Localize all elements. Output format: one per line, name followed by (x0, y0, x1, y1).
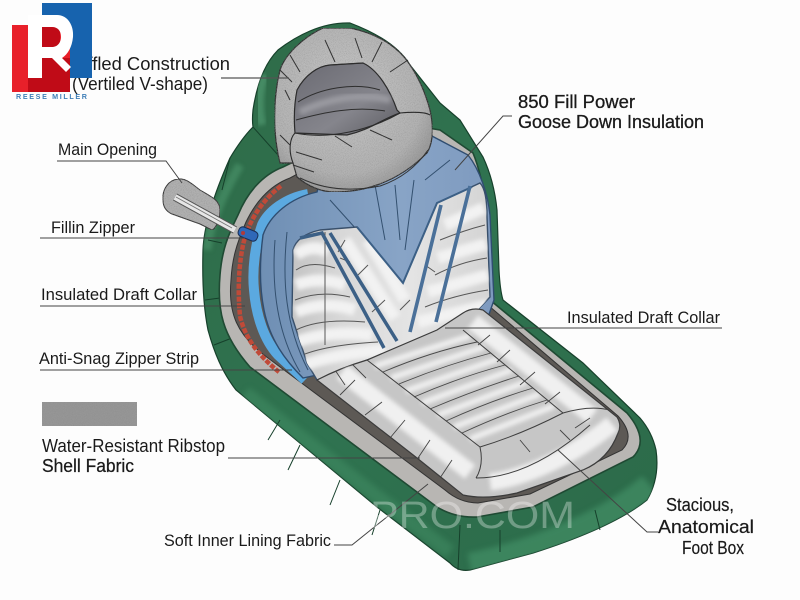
callout: fillin zipper: Fillin Zipper (51, 218, 135, 237)
green outer shell (203, 23, 657, 570)
gray rim (219, 120, 640, 517)
logo (12, 3, 92, 101)
callout: shell fabric: Shell Fabric (42, 456, 134, 476)
callout: main opening (57, 140, 182, 183)
callout: foot box: Foot Box (682, 538, 744, 558)
callout: anti-snag zipper strip: Anti-Snag Zipper Strip (39, 349, 199, 368)
foot box insulated bed (317, 309, 620, 497)
callout: baffled construction (65, 54, 289, 94)
callout: fill power: 850 Fill Power (518, 92, 635, 112)
fabric swatch (42, 402, 137, 426)
hood (275, 28, 432, 192)
red zipper strip (239, 186, 281, 372)
callout: shell fabric (42, 436, 420, 476)
light blue draft tube (253, 194, 308, 380)
logo: REESE MILLER (16, 92, 88, 101)
callout: shell fabric: Water-Resistant Ribstop (42, 436, 225, 456)
callout: foot box (558, 450, 754, 558)
callout: inner lining (164, 484, 428, 550)
watermark: PRO.COM (370, 495, 575, 537)
blue back panels (260, 135, 494, 378)
callout: inner lining: Soft Inner Lining Fabric (164, 532, 331, 550)
callout: baffled construction: Baffled Construction (65, 54, 230, 74)
callout: main opening: Main Opening (58, 140, 157, 159)
callout: fill power (455, 92, 704, 170)
callout: insulated draft collar right: Insulated Draft Collar (567, 308, 720, 327)
callout: fill power: Goose Down Insulation (518, 112, 704, 132)
sleeping bag illustration (163, 23, 657, 570)
callout: insulated draft collar left: Insulated Draft Collar (41, 285, 197, 304)
hood opening (294, 63, 400, 135)
callout: baffled construction: (Vertiled V-shape) (72, 74, 208, 94)
zipper pull (163, 179, 259, 242)
callout: foot box: Anatomical (658, 517, 754, 537)
white baffled insulation (292, 183, 490, 380)
dark inner lining (230, 130, 628, 503)
callout: foot box: Stacious, (666, 495, 734, 515)
